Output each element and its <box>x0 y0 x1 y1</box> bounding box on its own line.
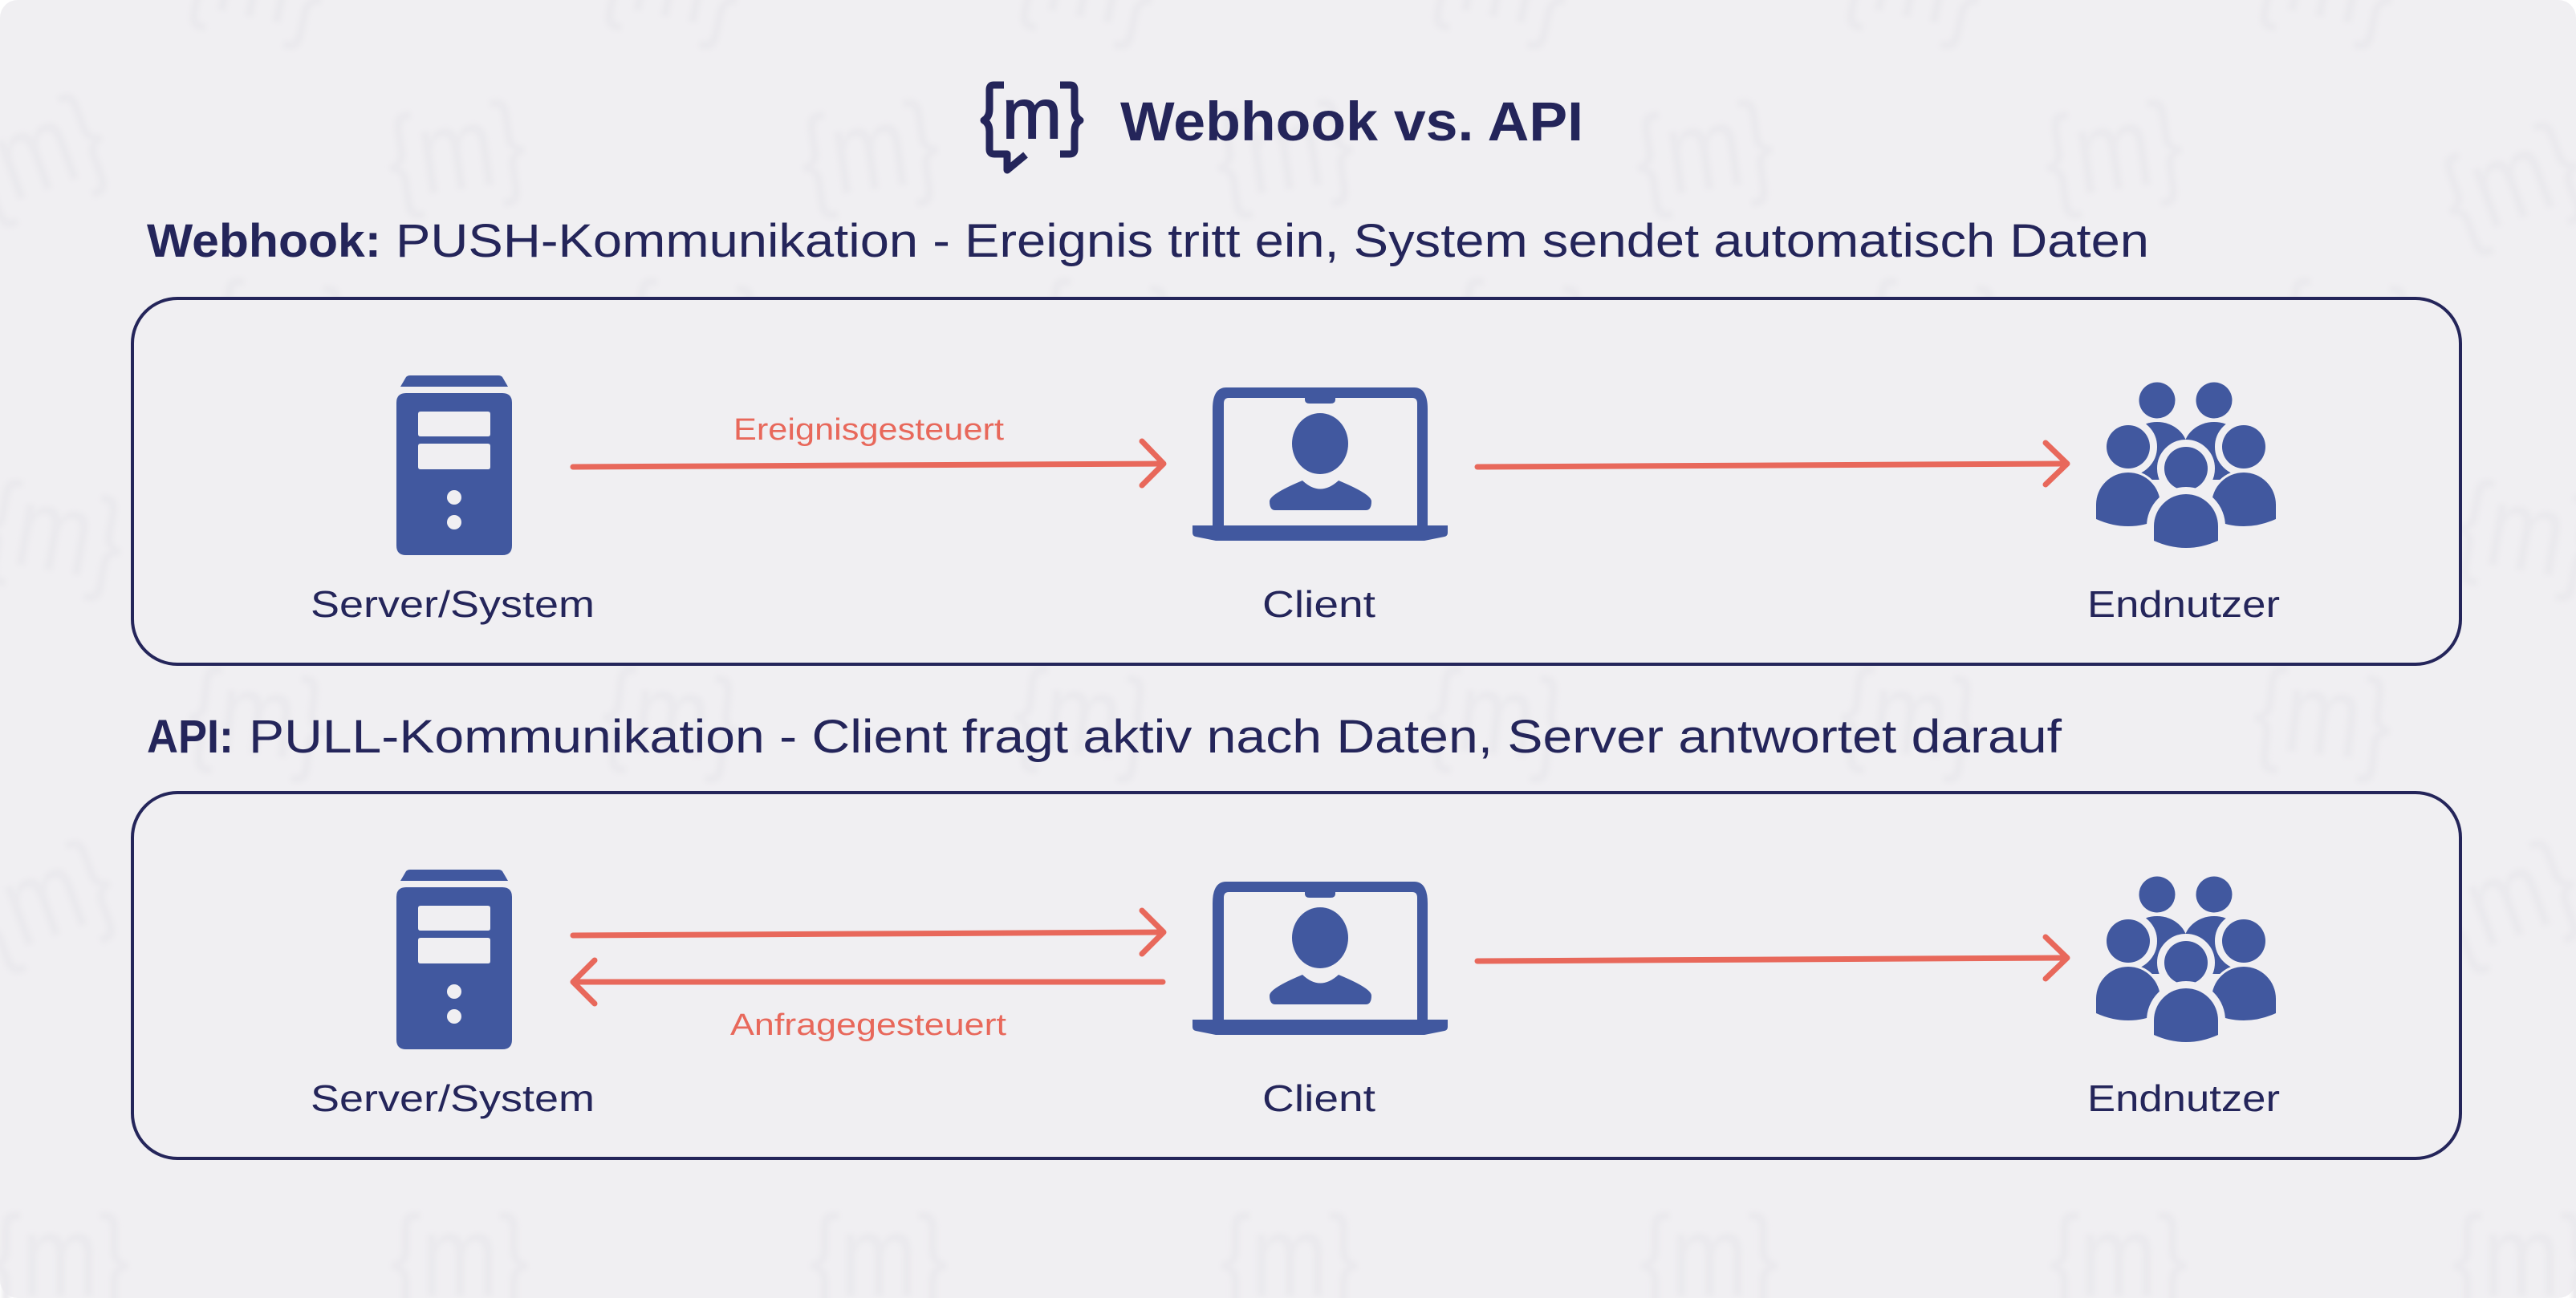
label: end users: Endnutzer <box>2087 583 2280 625</box>
arrow: client to users <box>1477 443 2067 485</box>
watermark pattern: {m} <box>1421 643 1572 786</box>
logo: m <box>1002 75 1062 153</box>
watermark pattern: {m} <box>2272 255 2421 395</box>
label: event driven: Ereignisgesteuert <box>733 413 1004 447</box>
heading: api: PULL-Kommunikation - Client fragt aktiv nach Daten, Server antwortet darauf <box>249 711 2062 763</box>
arrow: client to server <box>573 960 1163 1004</box>
watermark pattern: {m} <box>378 75 534 223</box>
label: request driven: Anfragegesteuert <box>730 1008 1007 1042</box>
watermark pattern: {m} <box>1206 75 1362 223</box>
label: end users: Endnutzer <box>2087 1077 2280 1119</box>
watermark pattern: {m} <box>791 75 947 223</box>
watermark pattern: {m} <box>1445 255 1595 395</box>
watermark pattern: {m} <box>1032 255 1181 395</box>
icon: users group <box>2096 876 2276 1042</box>
heading: api: API: <box>147 711 234 763</box>
watermark pattern: {m} <box>1008 643 1159 786</box>
icon: users group <box>2096 382 2276 548</box>
title block <box>984 75 1583 170</box>
icon: client laptop <box>1193 882 1448 1035</box>
icon: server <box>396 870 512 1049</box>
watermark pattern: {m} <box>1859 255 2008 395</box>
heading: webhook: PUSH-Kommunikation - Ereignis tritt ein, System sendet automatisch Daten <box>396 215 2149 267</box>
label: client: Client <box>1262 1077 1375 1119</box>
title: Webhook vs. API <box>1120 91 1583 152</box>
watermark pattern: {m} <box>1834 643 1985 786</box>
watermark pattern: {m} <box>596 643 747 786</box>
arrow: server to client <box>573 441 1164 485</box>
watermark pattern: {m} <box>2248 643 2399 786</box>
heading: webhook: Webhook: <box>147 215 381 267</box>
label: client: Client <box>1262 583 1375 625</box>
watermark pattern: {m} <box>205 255 355 395</box>
watermark pattern: {m} <box>619 255 768 395</box>
panel: api <box>132 793 2460 1158</box>
arrow: server to client <box>573 911 1164 954</box>
icon: client laptop <box>1193 387 1448 541</box>
watermark pattern: {m} <box>182 643 333 786</box>
label: server: Server/System <box>311 583 595 625</box>
label: server: Server/System <box>311 1077 595 1119</box>
watermark pattern: {m} <box>1626 75 1782 223</box>
panel: webhook <box>132 298 2460 664</box>
watermark pattern: {m} <box>2035 75 2191 223</box>
logo <box>984 75 1080 170</box>
arrow: client to users <box>1477 937 2067 979</box>
icon: server <box>396 375 512 555</box>
